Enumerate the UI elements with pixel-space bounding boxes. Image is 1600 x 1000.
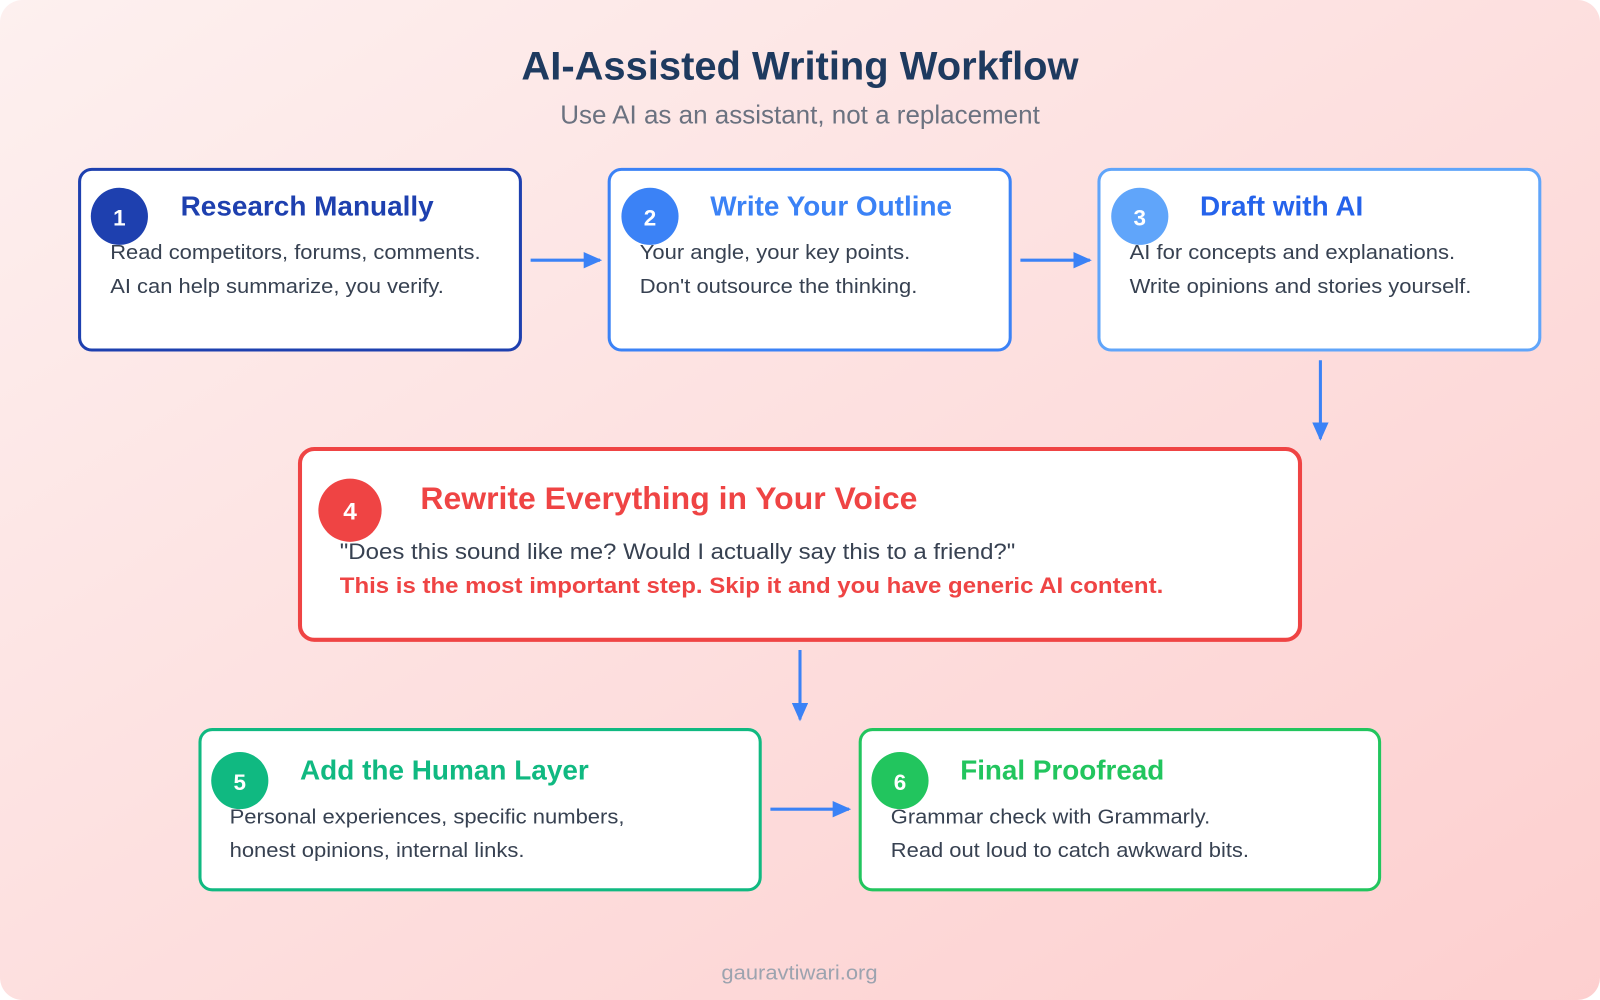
panel: step 1 bbox=[80, 169, 520, 350]
panel: step 2: Write Your Outline bbox=[710, 190, 952, 221]
arrow 4 to 5 bbox=[798, 650, 802, 719]
subtitle: Use AI as an assistant, not a replacement bbox=[560, 101, 1040, 129]
panel: step 5: 5 bbox=[234, 770, 246, 795]
panel: step 5: Add the Human Layer bbox=[300, 755, 589, 786]
arrow 1 to 2 bbox=[531, 259, 600, 262]
panel: step 3: Write opinions and stories yourself. bbox=[1130, 276, 1471, 298]
title: AI-Assisted Writing Workflow bbox=[521, 45, 1080, 89]
footer: gauravtiwari.org bbox=[721, 963, 878, 985]
panel: step 2: Your angle, your key points. bbox=[640, 242, 910, 264]
panel: step 4: 4 bbox=[343, 498, 357, 525]
panel: step 5: honest opinions, internal links. bbox=[230, 840, 524, 862]
panel: step 1: Read competitors, forums, comments. bbox=[110, 242, 481, 264]
panel: step 5: Personal experiences, specific numbers, bbox=[230, 806, 624, 828]
panel: step 2: 2 bbox=[644, 206, 656, 231]
panel: step 3: AI for concepts and explanations. bbox=[1130, 242, 1455, 264]
panel: step 2: Don't outsource the thinking. bbox=[640, 276, 917, 298]
panel: step 1: Research Manually bbox=[181, 190, 434, 221]
panel: step 6 bbox=[860, 730, 1380, 890]
panel: step 4 bbox=[300, 449, 1300, 640]
panel: step 3 bbox=[1099, 169, 1540, 350]
panel: step 1: 1 bbox=[113, 206, 126, 231]
panel: step 2 bbox=[609, 169, 1010, 350]
panel: step 4: Rewrite Everything in Your Voice bbox=[420, 480, 917, 516]
arrow 2 to 3 bbox=[1020, 259, 1090, 262]
arrow 5 to 6 bbox=[770, 808, 849, 811]
panel: step 4: This is the most important step. Skip it and you have generic AI content. bbox=[340, 573, 1163, 598]
panel: step 6: Grammar check with Grammarly. bbox=[891, 806, 1210, 828]
panel: step 4: "Does this sound like me? Would I actually say this to a friend?" bbox=[340, 539, 1015, 564]
panel: step 3: 3 bbox=[1134, 206, 1146, 231]
panel: step 5 bbox=[200, 730, 760, 890]
panel: step 1: AI can help summarize, you verify. bbox=[110, 276, 444, 298]
panel: step 6: Final Proofread bbox=[960, 755, 1164, 786]
arrow 3 to 4 bbox=[1319, 360, 1322, 439]
panel: step 3: Draft with AI bbox=[1200, 190, 1363, 221]
panel: step 6: 6 bbox=[894, 770, 906, 795]
panel: step 6: Read out loud to catch awkward bits. bbox=[891, 840, 1249, 862]
